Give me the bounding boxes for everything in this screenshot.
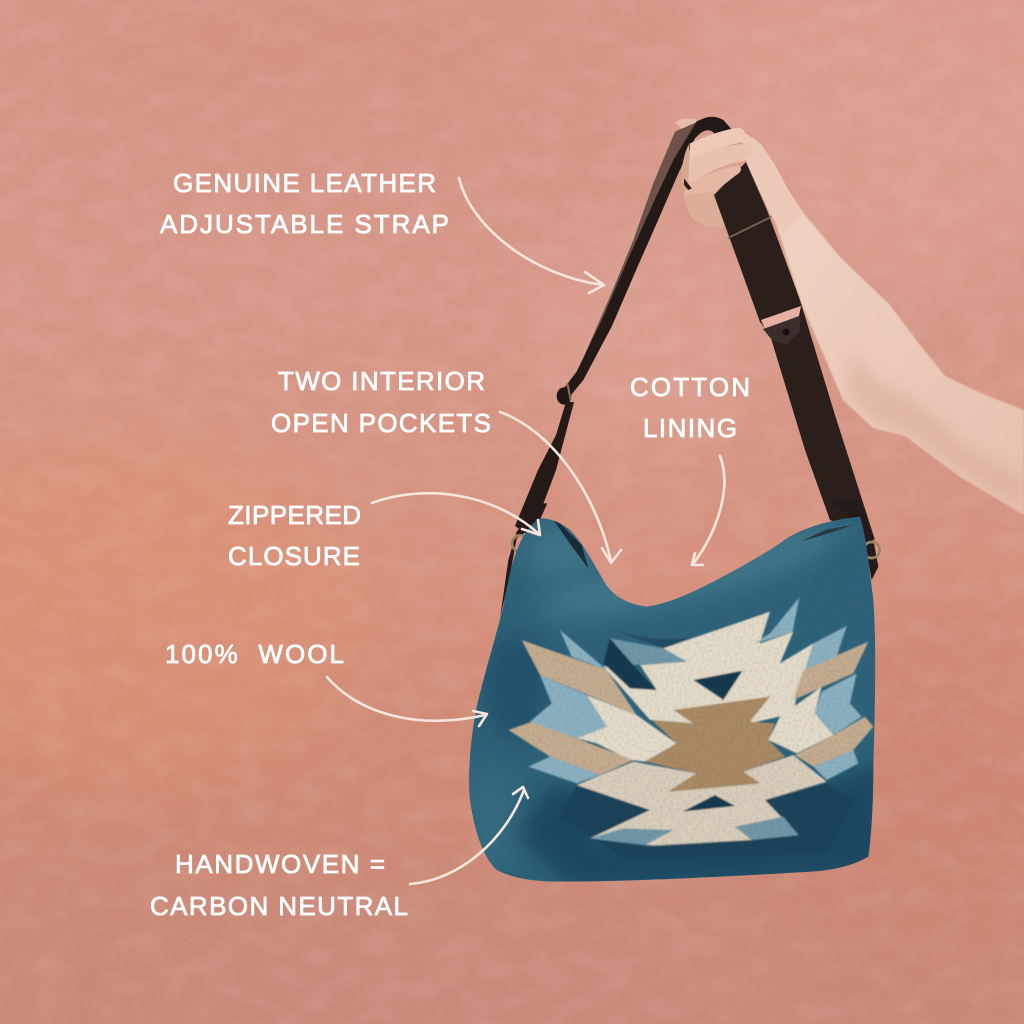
bag — [460, 500, 890, 893]
pattern: central brown — [645, 697, 785, 792]
label: zippered closure: ZIPPERED — [228, 500, 361, 530]
label: handwoven carbon neutral — [150, 849, 408, 921]
pattern: lower cream — [577, 755, 827, 846]
label: two interior open pockets: OPEN POCKETS — [271, 408, 491, 438]
label: genuine leather adjustable strap: ADJUSTABLE STRAP — [160, 209, 449, 239]
arrow: to strap — [459, 178, 604, 293]
label: cotton lining: LINING — [643, 413, 737, 443]
pattern: upper dark panel — [624, 633, 696, 648]
label: two interior open pockets — [271, 366, 491, 438]
hand: fingers — [681, 127, 752, 195]
label: zippered closure: CLOSURE — [228, 541, 360, 571]
label: cotton lining — [630, 372, 750, 443]
strap: brown webbing and thin leather edge — [557, 117, 732, 405]
pattern: pale blue — [528, 597, 862, 845]
pattern: cream — [577, 612, 833, 762]
arrow: to pockets — [500, 412, 621, 563]
label: genuine leather adjustable strap: GENUINE LEATHER — [173, 168, 436, 198]
pattern: light tan — [508, 640, 873, 775]
arrow: to lining — [692, 456, 724, 565]
arm — [745, 135, 1024, 515]
pattern: dark accents — [603, 638, 743, 812]
arrow: to wool — [327, 677, 487, 726]
arrow: to zipper — [372, 493, 540, 535]
label: two interior open pockets: TWO INTERIOR — [278, 366, 485, 396]
strap: lower left leather section — [515, 402, 574, 535]
label: genuine leather adjustable strap — [160, 168, 449, 239]
wool body — [469, 516, 876, 882]
label: cotton lining: COTTON — [630, 372, 750, 402]
rings and tabs — [500, 500, 880, 618]
arrow: to weave — [410, 787, 528, 884]
label: zippered closure — [228, 500, 361, 571]
label: handwoven carbon neutral: HANDWOVEN = — [175, 849, 385, 879]
lower dark band — [517, 760, 883, 887]
hand: back of hand and thumb — [675, 119, 803, 233]
strap: main dark leather with buckle — [714, 162, 875, 540]
label: 100% wool: 100% WOOL — [165, 639, 344, 669]
label: handwoven carbon neutral: CARBON NEUTRAL — [150, 891, 408, 921]
